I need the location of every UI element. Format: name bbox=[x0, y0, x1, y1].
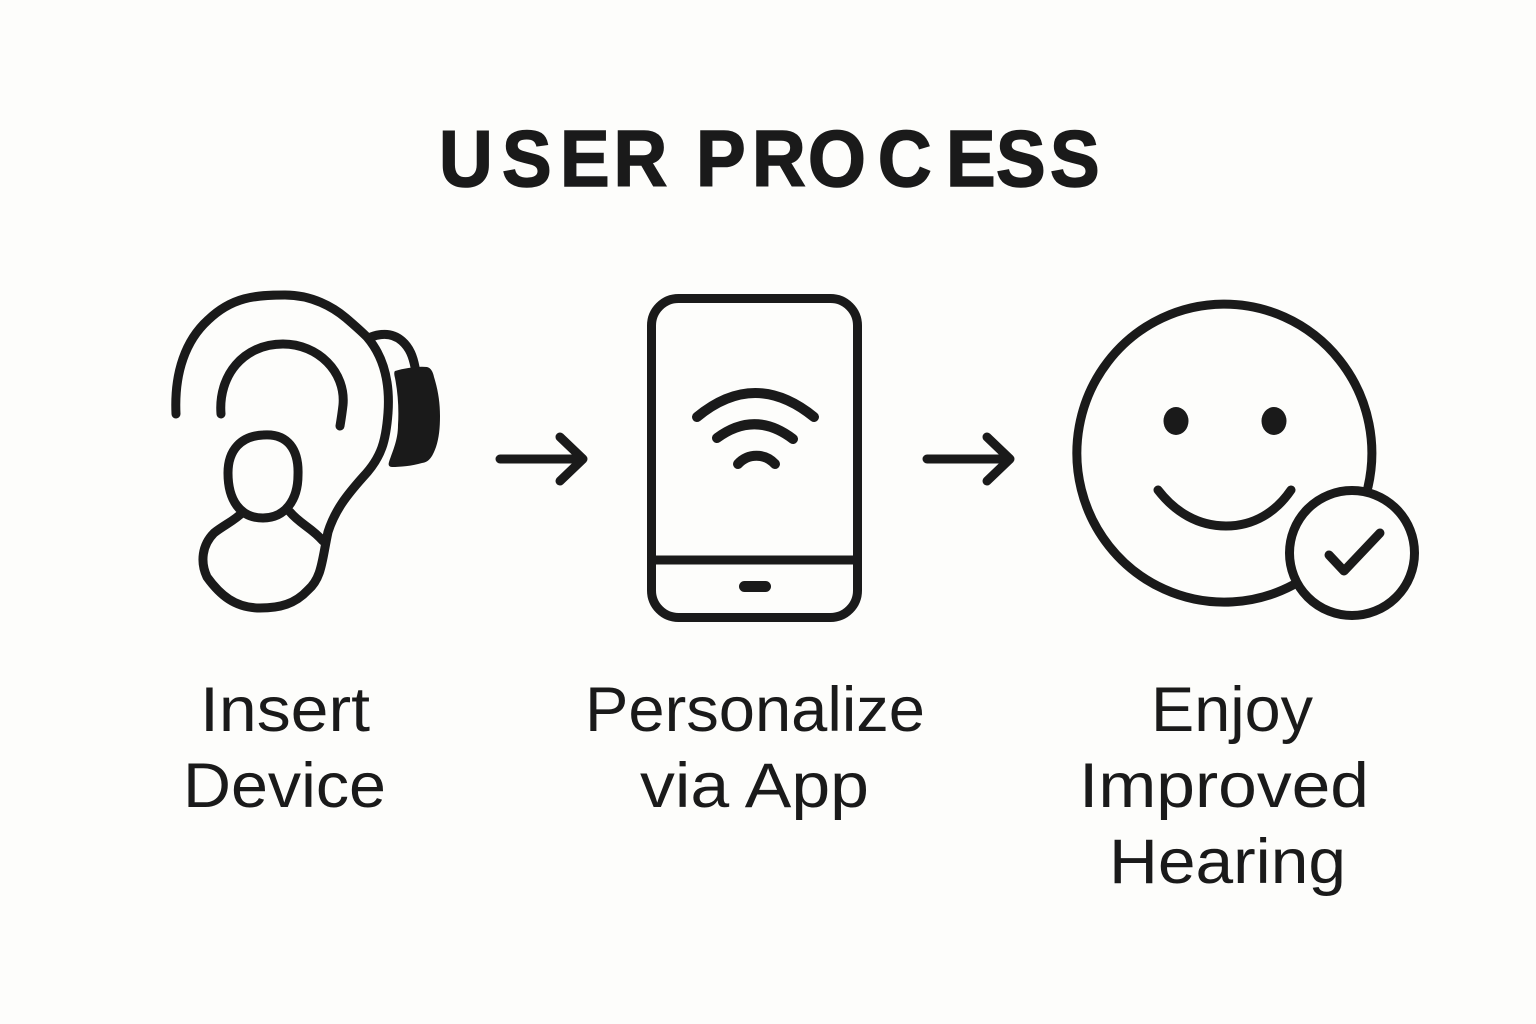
arrow: step 1 to 2 bbox=[500, 437, 583, 481]
check badge bbox=[1290, 490, 1414, 616]
head bbox=[228, 435, 298, 518]
label: Insert Device bbox=[183, 675, 386, 821]
arrow: step 2 to 3 bbox=[927, 437, 1010, 481]
smile bbox=[1158, 490, 1291, 526]
neck line bbox=[290, 512, 323, 541]
label: Enjoy Improved Hearing: Enjoy bbox=[1151, 675, 1314, 745]
inner ear arc bbox=[221, 344, 343, 426]
hearing aid hook bbox=[371, 334, 415, 367]
phone body bbox=[652, 298, 858, 618]
home button bbox=[739, 581, 771, 592]
label: Enjoy Improved Hearing: Hearing bbox=[1109, 827, 1346, 897]
icon: smartphone with wireless signal bbox=[652, 298, 858, 618]
phone divider bbox=[652, 556, 857, 564]
label: Personalize via App: Personalize bbox=[585, 675, 925, 745]
wireless signal bbox=[697, 393, 814, 464]
left eye bbox=[1164, 407, 1188, 435]
title: USER PROCESS bbox=[439, 115, 1100, 204]
label: Personalize via App: via App bbox=[640, 751, 869, 821]
face outline bbox=[1077, 304, 1372, 602]
label: Insert Device: Insert bbox=[200, 675, 371, 745]
hearing aid body bbox=[389, 367, 440, 467]
ear outline bbox=[176, 295, 388, 608]
icon: smiley with check badge bbox=[1077, 304, 1414, 616]
label: Personalize via App bbox=[585, 675, 925, 821]
right eye bbox=[1262, 407, 1286, 435]
label: Insert Device: Device bbox=[183, 751, 386, 821]
label: Enjoy Improved Hearing: Improved bbox=[1079, 751, 1369, 821]
icon: ear with hearing aid bbox=[176, 295, 440, 608]
label: Enjoy Improved Hearing bbox=[1079, 675, 1369, 897]
